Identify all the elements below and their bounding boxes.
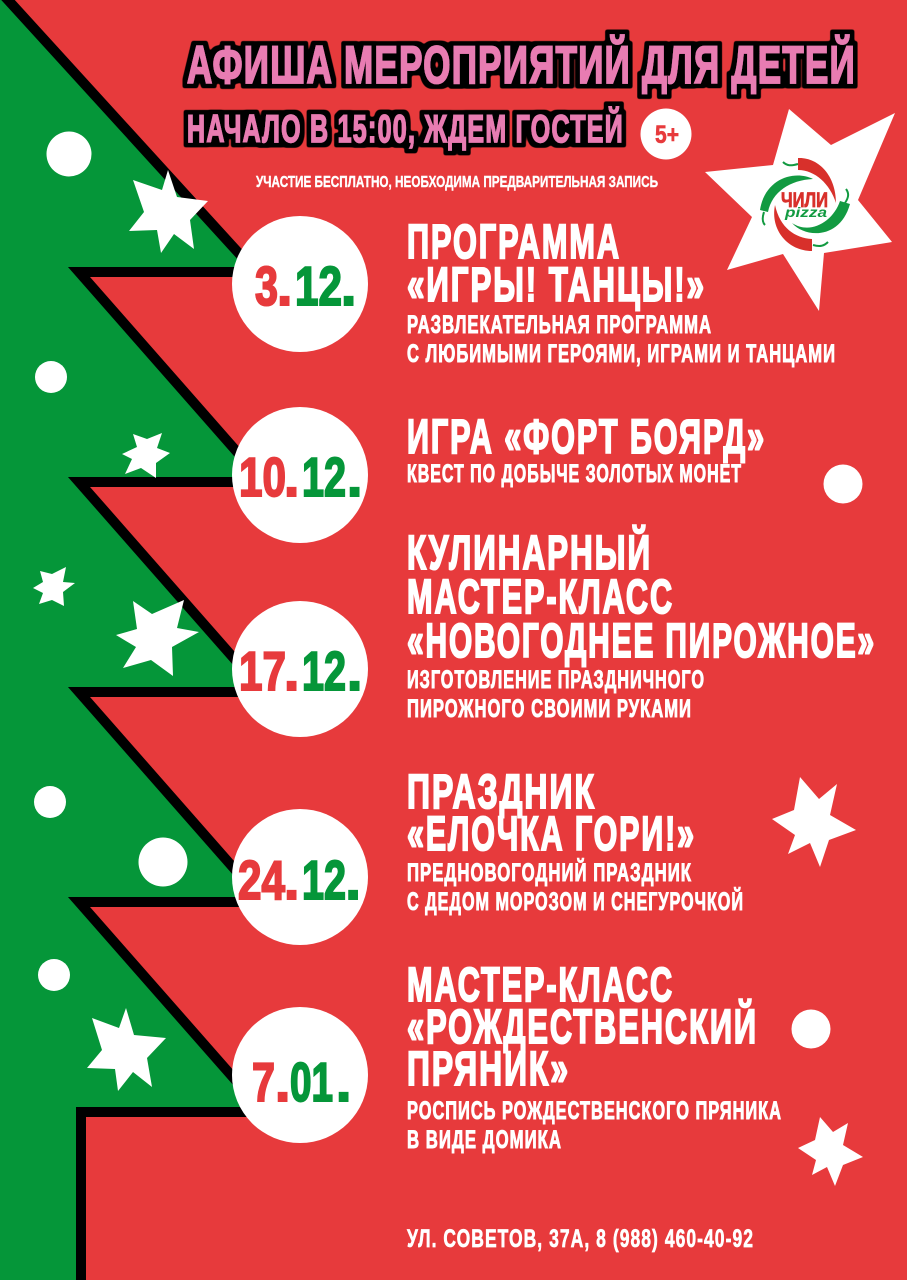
event 4: date: . [346, 849, 361, 911]
event 3: details: ИЗГОТОВЛЕНИЕ ПРАЗДНИЧНОГО [407, 666, 705, 694]
event 2: date: . [347, 446, 362, 508]
event 1: date [232, 216, 368, 352]
event 1: details: РАЗВЛЕКАТЕЛЬНАЯ ПРОГРАММА [407, 311, 712, 339]
event 4: date [232, 809, 368, 945]
event 5: date: 7 [252, 1051, 275, 1113]
event 2: date: . [284, 446, 299, 508]
event 5: details [407, 959, 782, 1154]
event 1: date: 12 [295, 255, 342, 317]
event 4: date: 24 [238, 849, 285, 911]
event 2: date: 10 [239, 446, 286, 508]
event 4: details: «ЕЛОЧКА ГОРИ!» [407, 808, 696, 861]
event 3: details: МАСТЕР-КЛАСС [407, 571, 674, 624]
event 5: date [232, 1007, 368, 1143]
event 1: date: 3 [255, 255, 278, 317]
event 4: details: ПРЕДНОВОГОДНИЙ ПРАЗДНИК [407, 857, 692, 887]
age badge: 5+ [655, 121, 679, 149]
event 5: details: МАСТЕР-КЛАСС [407, 959, 674, 1012]
event 5: date: . [336, 1051, 351, 1113]
event 3: details: ПИРОЖНОГО СВОИМИ РУКАМИ [407, 695, 692, 723]
subtitle: start time: НАЧАЛО В 15:00, ЖДЕМ ГОСТЕЙ [187, 106, 624, 151]
free participation note: УЧАСТИЕ БЕСПЛАТНО, НЕОБХОДИМА ПРЕДВАРИТЕЛЬНАЯ ЗАПИСЬ [256, 174, 658, 191]
logo: chili pizza star: ЧИЛИ [781, 189, 828, 212]
event 3: date: . [347, 640, 362, 702]
event 5: date: . [275, 1051, 290, 1113]
logo: chili pizza star: pizza [784, 204, 827, 220]
event 3: details [407, 525, 876, 723]
event 1: date: . [277, 255, 292, 317]
event 4: date: . [284, 849, 299, 911]
event 5: details: ПРЯНИК» [407, 1043, 570, 1096]
event 1: details: ПРОГРАММА [407, 216, 621, 269]
event 3: date: 17 [239, 640, 286, 702]
event 3: date: 12 [302, 640, 346, 702]
tree decorations [33, 132, 208, 1091]
event 4: details [407, 766, 744, 916]
logo: chili pizza star [705, 109, 895, 311]
event 5: date: 01 [290, 1051, 333, 1113]
event 3: date [232, 601, 368, 737]
event 1: date: . [341, 255, 356, 317]
address and phone: УЛ. СОВЕТОВ, 37А, 8 (988) 460-40-92 [407, 1225, 754, 1253]
age badge [640, 108, 692, 160]
event 2: details [407, 411, 766, 488]
event 1: details [407, 216, 836, 368]
right side decorations [772, 464, 863, 1186]
event 4: date: 12 [302, 849, 346, 911]
event 1: details: «ИГРЫ! ТАНЦЫ!» [407, 259, 706, 312]
christmas tree [0, 0, 245, 1280]
event 5: details: В ВИДЕ ДОМИКА [407, 1126, 562, 1154]
event 4: details: ПРАЗДНИК [407, 766, 596, 819]
event 2: date [232, 407, 368, 543]
event 3: date: . [284, 640, 299, 702]
event 3: details: КУЛИНАРНЫЙ [407, 525, 652, 580]
event 2: date: 12 [302, 446, 346, 508]
